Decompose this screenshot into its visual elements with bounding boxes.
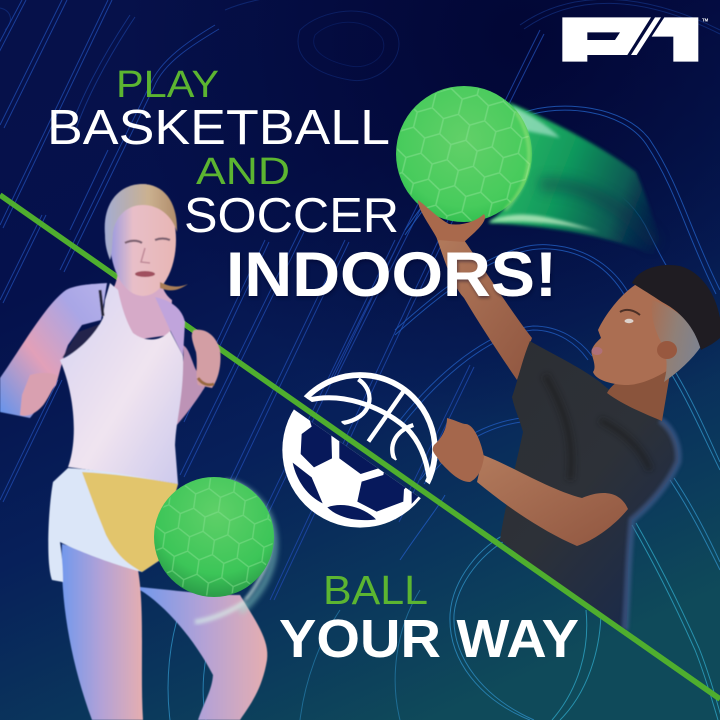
lens flare on thigh xyxy=(195,602,245,622)
head xyxy=(592,285,682,385)
eyes xyxy=(125,238,170,243)
logo P xyxy=(562,17,651,62)
person: boy xyxy=(418,200,720,640)
head xyxy=(110,184,176,296)
right shoulder xyxy=(155,297,185,356)
ball body xyxy=(154,477,274,597)
knee leg xyxy=(140,587,267,720)
shirt blue rim light xyxy=(625,420,678,630)
fist xyxy=(20,373,58,416)
nose shadow xyxy=(141,248,150,263)
SOCCER: SOCCER xyxy=(184,189,399,243)
person: girl xyxy=(0,184,267,720)
PLAY: PLAY xyxy=(116,64,219,106)
shorts xyxy=(48,468,178,582)
spin glow xyxy=(230,482,275,612)
wrist bracelet xyxy=(198,378,214,385)
ponytail xyxy=(160,282,188,290)
far arm xyxy=(176,345,205,426)
BASKETBALL: BASKETBALL xyxy=(47,101,390,155)
bra strap xyxy=(100,290,103,316)
hair xyxy=(105,184,177,260)
ball body xyxy=(396,86,532,222)
raised arm xyxy=(436,236,532,380)
neck xyxy=(607,371,670,421)
raised hand xyxy=(418,200,485,242)
shaved side of head xyxy=(654,302,700,382)
lower ball xyxy=(154,477,275,612)
armpit shadow xyxy=(62,324,100,358)
spin highlight xyxy=(225,480,271,600)
logo: P/1 xyxy=(562,17,709,62)
ball hexagon panels xyxy=(155,478,273,596)
lips xyxy=(592,347,602,355)
tank top xyxy=(60,283,183,484)
near arm xyxy=(0,283,107,418)
right contour arches xyxy=(168,106,720,720)
ball edge glow xyxy=(505,112,529,210)
trail body xyxy=(488,102,668,262)
trail of upper ball xyxy=(488,102,668,262)
t-shirt xyxy=(500,341,678,640)
fist xyxy=(433,418,484,482)
YOUR WAY: YOUR WAY xyxy=(279,609,579,669)
mouth xyxy=(135,271,155,277)
hair xyxy=(632,265,720,350)
AND: AND xyxy=(196,151,290,193)
shorts yellow panel xyxy=(82,472,178,572)
lower forearm xyxy=(477,455,628,546)
legs xyxy=(62,544,143,720)
icon: basketball half xyxy=(304,372,438,484)
trail highlights xyxy=(512,106,560,138)
green diagonal line xyxy=(0,195,720,699)
green line over boy xyxy=(480,531,720,699)
text: headline xyxy=(47,64,399,243)
far hand xyxy=(192,330,221,388)
text: INDOORS!: INDOORS! xyxy=(226,240,557,310)
shirt folds xyxy=(545,375,650,480)
ball hexagon panels xyxy=(397,87,531,221)
logo 1 xyxy=(652,17,698,62)
ear xyxy=(657,341,677,359)
eyebrow xyxy=(620,310,640,315)
eye xyxy=(624,319,634,323)
icon: soccer half xyxy=(282,410,421,528)
BALL: BALL xyxy=(323,567,428,613)
icon: soccer-basketball ball xyxy=(282,372,438,528)
text: ball your way xyxy=(279,567,579,669)
upper ball xyxy=(396,86,532,222)
logo slash xyxy=(631,17,661,55)
trademark: TM xyxy=(702,18,709,23)
neck and chest xyxy=(108,268,172,340)
